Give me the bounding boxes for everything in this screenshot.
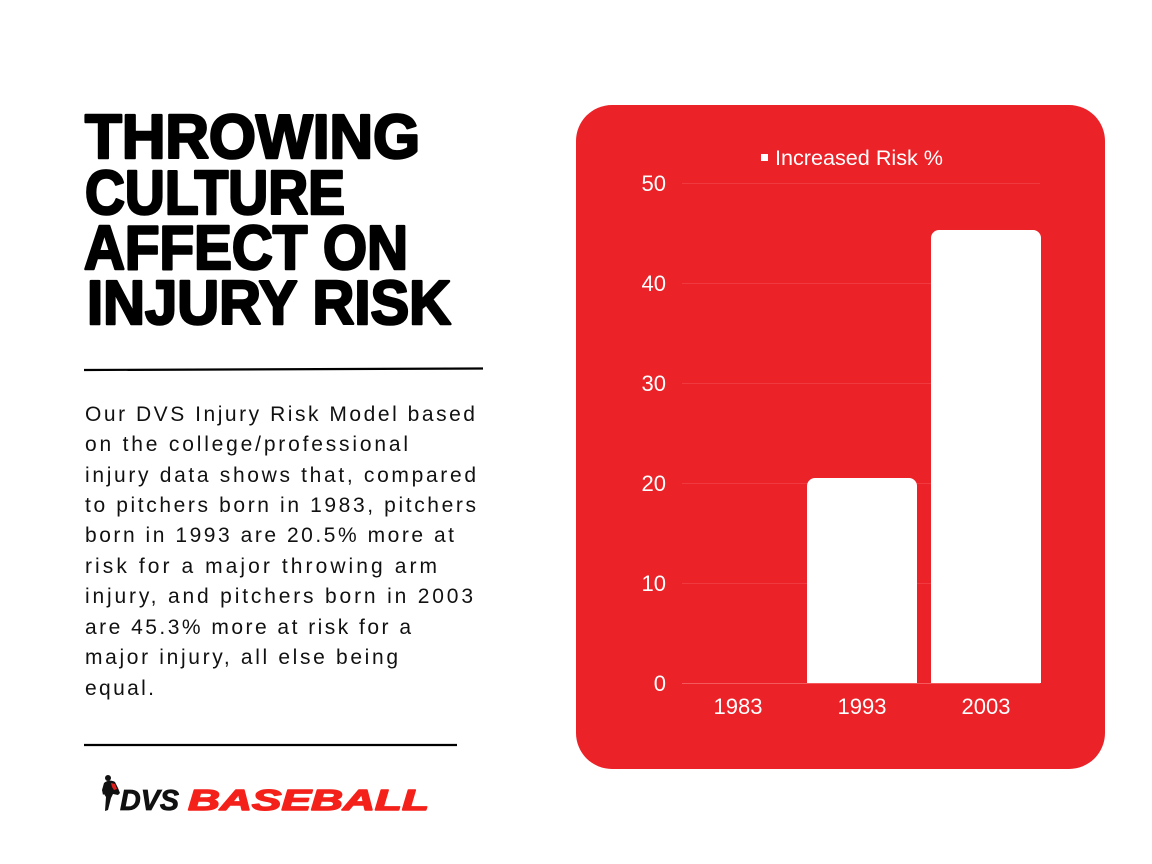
- logo: DVS Baseball: [102, 775, 429, 817]
- body text: equal.: [85, 677, 154, 700]
- x axis labels: 1983: [714, 694, 762, 719]
- top divider: [84, 368, 483, 370]
- y axis labels: 0: [654, 671, 666, 696]
- logo wordmark: DVS: DVS: [120, 785, 180, 817]
- body text: injury, and pitchers born in 2003: [85, 585, 473, 608]
- bottom divider: [84, 744, 457, 746]
- bar: 1993: [807, 478, 917, 683]
- title: [84, 103, 451, 338]
- body text: risk for a major throwing arm: [85, 555, 437, 578]
- y axis labels: 30: [642, 371, 666, 396]
- y axis labels: 20: [642, 471, 666, 496]
- title: INJURY RISK: [87, 269, 451, 338]
- y axis labels: [642, 171, 666, 696]
- body text: born in 1993 are 20.5% more at: [85, 524, 454, 547]
- logo wordmark: BASEBALL: BASEBALL: [188, 785, 429, 817]
- bar: 2003: [931, 230, 1041, 683]
- title: THROWING: [85, 103, 420, 172]
- body text: on the college/professional: [85, 433, 408, 456]
- icon: pitcher silhouette: [102, 775, 120, 811]
- body text: [85, 403, 476, 700]
- panel: chart background: [576, 105, 1105, 769]
- body text: to pitchers born in 1983, pitchers: [85, 494, 476, 517]
- body text: injury data shows that, compared: [85, 464, 476, 487]
- x axis labels: [714, 694, 1010, 719]
- bar chart: [642, 147, 1041, 719]
- title: CULTURE: [85, 159, 345, 228]
- y axis labels: 10: [642, 571, 666, 596]
- y axis labels: 40: [642, 271, 666, 296]
- y axis labels: 50: [642, 171, 666, 196]
- x axis labels: 1993: [838, 694, 886, 719]
- chart legend: Increased Risk %: [775, 147, 943, 170]
- body text: Our DVS Injury Risk Model based: [85, 403, 475, 426]
- title: AFFECT ON: [84, 214, 408, 283]
- body text: are 45.3% more at risk for a: [85, 616, 411, 639]
- body text: major injury, all else being: [85, 646, 398, 669]
- x axis labels: 2003: [962, 694, 1010, 719]
- y axis grid lines: [682, 184, 1040, 684]
